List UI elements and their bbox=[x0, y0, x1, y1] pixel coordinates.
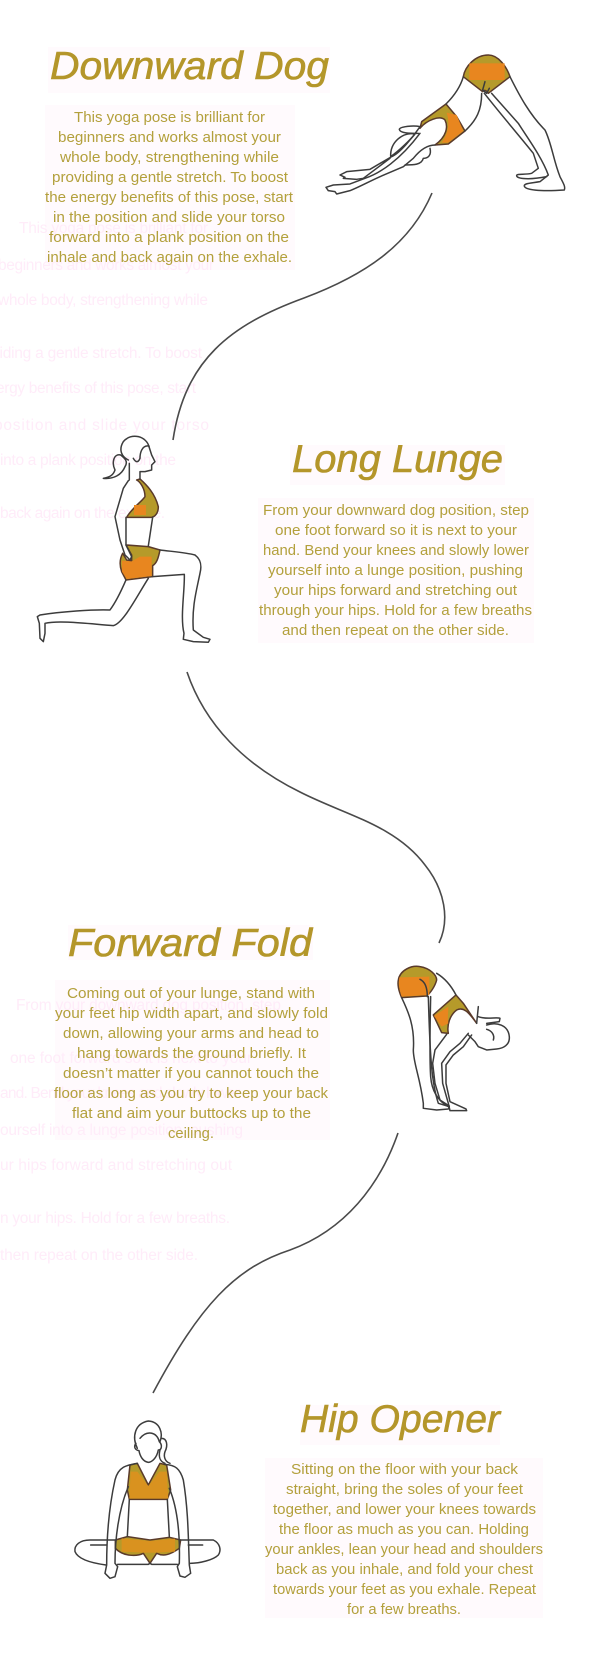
text block: Downward Dog description: the energy benefits of this pose, start bbox=[45, 190, 293, 206]
illustration: hip opener pose bbox=[75, 1421, 220, 1578]
ghost text: faded lunge description: and. Bend your knees and slowly lower bbox=[0, 1085, 240, 1102]
shorts bbox=[463, 55, 510, 93]
arrow: curve from long lunge to forward fold bbox=[187, 672, 445, 943]
ghost text: faded lunge description: ourself into a lunge position, pushing bbox=[0, 1122, 243, 1139]
heading: Long Lunge: Long Lunge bbox=[292, 438, 503, 481]
ghost text: faded pose description: into a plank position on the bbox=[0, 452, 176, 469]
text block: Downward Dog description bbox=[45, 110, 293, 266]
text block: Long Lunge description: hand. Bend your knees and slowly lower bbox=[263, 543, 529, 559]
shorts bbox=[398, 966, 437, 998]
ghost text: faded pose description: This yoga pose is brilliant for bbox=[19, 220, 208, 237]
text block: Hip Opener description: for a few breaths. bbox=[347, 1602, 461, 1618]
heading: Downward Dog: Downward Dog bbox=[50, 45, 329, 88]
text block: Long Lunge description: From your downward dog position, step bbox=[263, 503, 529, 519]
text block: Forward Fold description: down, allowing your arms and head to bbox=[63, 1026, 319, 1042]
ghost text: faded lunge description: one foot forward so it is next to your bbox=[10, 1050, 252, 1067]
top bbox=[127, 1463, 171, 1499]
text block: Forward Fold description: hang towards the ground briefly. It bbox=[77, 1046, 306, 1062]
ghost text: faded pose description bbox=[0, 220, 214, 522]
text block: Long Lunge description: your hips forward and stretching out bbox=[274, 583, 517, 599]
ghost text: faded lunge description: ur hips forward and stretching out bbox=[0, 1157, 233, 1174]
text block: Downward Dog description: beginners and works almost your bbox=[58, 130, 281, 146]
text block: Hip Opener description: towards your feet as you exhale. Repeat bbox=[273, 1582, 536, 1598]
text block: Downward Dog description: forward into a plank position on the bbox=[49, 230, 289, 246]
top bbox=[127, 479, 158, 517]
ghost text: faded pose description: beginners and works almost your bbox=[0, 257, 214, 274]
illustration: forward fold pose bbox=[398, 966, 509, 1111]
arrow: curve from downward dog to long lunge bbox=[173, 193, 432, 440]
illustration: long lunge pose bbox=[37, 436, 210, 642]
text block: Forward Fold description: ceiling. bbox=[168, 1126, 214, 1142]
text block: Forward Fold description: Coming out of your lunge, stand with bbox=[67, 986, 315, 1002]
ghost text: faded pose description: whole body, strengthening while bbox=[0, 292, 208, 309]
text block: Downward Dog description: inhale and back again on the exhale. bbox=[47, 250, 292, 266]
ghost text: faded pose description: position and slide your torso bbox=[0, 417, 209, 434]
body outline bbox=[75, 1421, 220, 1578]
ghost text: faded lunge description: then repeat on the other side. bbox=[0, 1247, 198, 1264]
ghost text: faded lunge description bbox=[0, 997, 281, 1264]
body outline bbox=[402, 973, 509, 1111]
body outline bbox=[37, 436, 210, 642]
ghost text: faded lunge description: n your hips. Hold for a few breaths. bbox=[0, 1210, 230, 1227]
heading: Forward Fold: Forward Fold bbox=[68, 922, 313, 965]
text block: Downward Dog description: whole body, strengthening while bbox=[59, 150, 279, 166]
text block: Hip Opener description: straight, bring the soles of your feet bbox=[286, 1482, 523, 1498]
shorts bbox=[120, 545, 160, 580]
text block: Hip Opener description: your ankles, lean your head and shoulders bbox=[265, 1542, 543, 1558]
illustration: downward dog pose bbox=[326, 55, 565, 194]
text block: Hip Opener description bbox=[265, 1462, 543, 1618]
text block: Downward Dog description: This yoga pose is brilliant for bbox=[74, 110, 265, 126]
top bbox=[433, 995, 477, 1033]
text block: Long Lunge description: yourself into a lunge position, pushing bbox=[268, 563, 523, 579]
ghost text: faded pose description: back again on the exhale. bbox=[0, 505, 165, 522]
text block: Long Lunge description: and then repeat on the other side. bbox=[282, 623, 509, 639]
arrow: curve from forward fold to hip opener bbox=[153, 1133, 398, 1393]
body outline bbox=[326, 77, 565, 194]
ghost text: faded lunge description: From your downward dog position, step bbox=[16, 997, 281, 1014]
ghost text: faded pose description: ergy benefits of this pose, start bbox=[0, 380, 197, 397]
text block: Downward Dog description: providing a gentle stretch. To boost bbox=[52, 170, 288, 186]
text block: Long Lunge description: through your hips. Hold for a few breaths bbox=[259, 603, 532, 619]
text block: Hip Opener description: back as you inhale, and fold your chest bbox=[276, 1562, 533, 1578]
text block: Long Lunge description: one foot forward so it is next to your bbox=[275, 523, 517, 539]
heading: Hip Opener: Hip Opener bbox=[300, 1398, 502, 1441]
text block: Forward Fold description bbox=[54, 986, 329, 1142]
text block: Downward Dog description: in the position and slide your torso bbox=[53, 210, 285, 226]
shorts bbox=[115, 1537, 181, 1563]
text block: Forward Fold description: doesn’t matter if you cannot touch the bbox=[63, 1066, 319, 1082]
text block: Forward Fold description: floor as long as you try to keep your back bbox=[54, 1086, 329, 1102]
text block: Forward Fold description: flat and aim your buttocks up to the bbox=[72, 1106, 311, 1122]
text block: Hip Opener description: Sitting on the floor with your back bbox=[291, 1462, 519, 1478]
text block: Forward Fold description: your feet hip width apart, and slowly fold bbox=[55, 1006, 328, 1022]
top bbox=[420, 104, 465, 145]
text block: Hip Opener description: the floor as much as you can. Holding bbox=[279, 1522, 529, 1538]
text block: Long Lunge description bbox=[259, 503, 532, 639]
text block: Hip Opener description: together, and lower your knees towards bbox=[273, 1502, 536, 1518]
